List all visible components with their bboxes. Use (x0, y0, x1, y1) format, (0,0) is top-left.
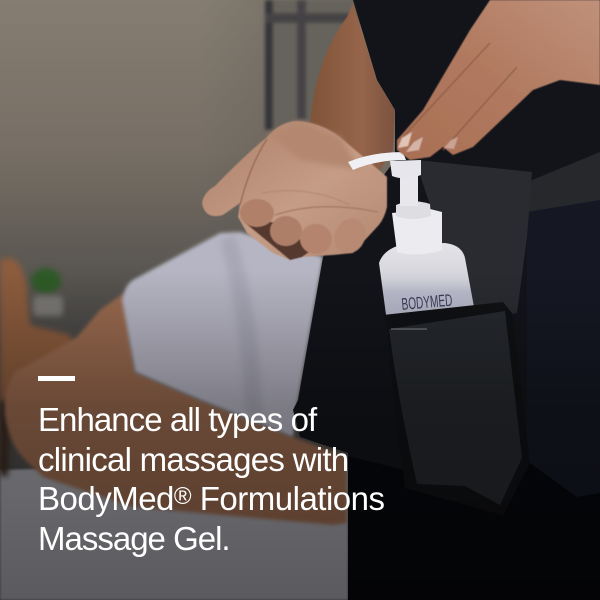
pump nozzle (348, 152, 421, 178)
belt strap (525, 152, 600, 212)
caption text: Massage Gel. (38, 520, 230, 557)
patient: white towel (122, 232, 323, 437)
accent rule (38, 376, 75, 380)
uniform: right panel (527, 200, 600, 497)
supporting hand: palm (202, 121, 387, 260)
patient: back and arm (0, 258, 80, 476)
caption text: Enhance all types of (38, 401, 316, 438)
pump bottle (379, 176, 474, 322)
bottle label: BODYMED (401, 291, 453, 314)
holster pouch back (417, 160, 532, 320)
pump bottle: Formulations (404, 312, 445, 321)
caption text: clinical massages with (38, 441, 348, 478)
therapist: forearm (310, 3, 395, 170)
therapist: black uniform (293, 0, 600, 600)
massage table sheet (0, 460, 348, 600)
pouch front pocket (383, 302, 530, 515)
uniform: lower trousers (348, 456, 600, 600)
fingers (244, 222, 312, 260)
upper hand on pump (397, 0, 600, 160)
fingernails (398, 132, 412, 148)
caption text: BodyMed® Formulations (38, 480, 385, 517)
background: dark shelf frame (265, 0, 358, 130)
plant (31, 268, 63, 316)
